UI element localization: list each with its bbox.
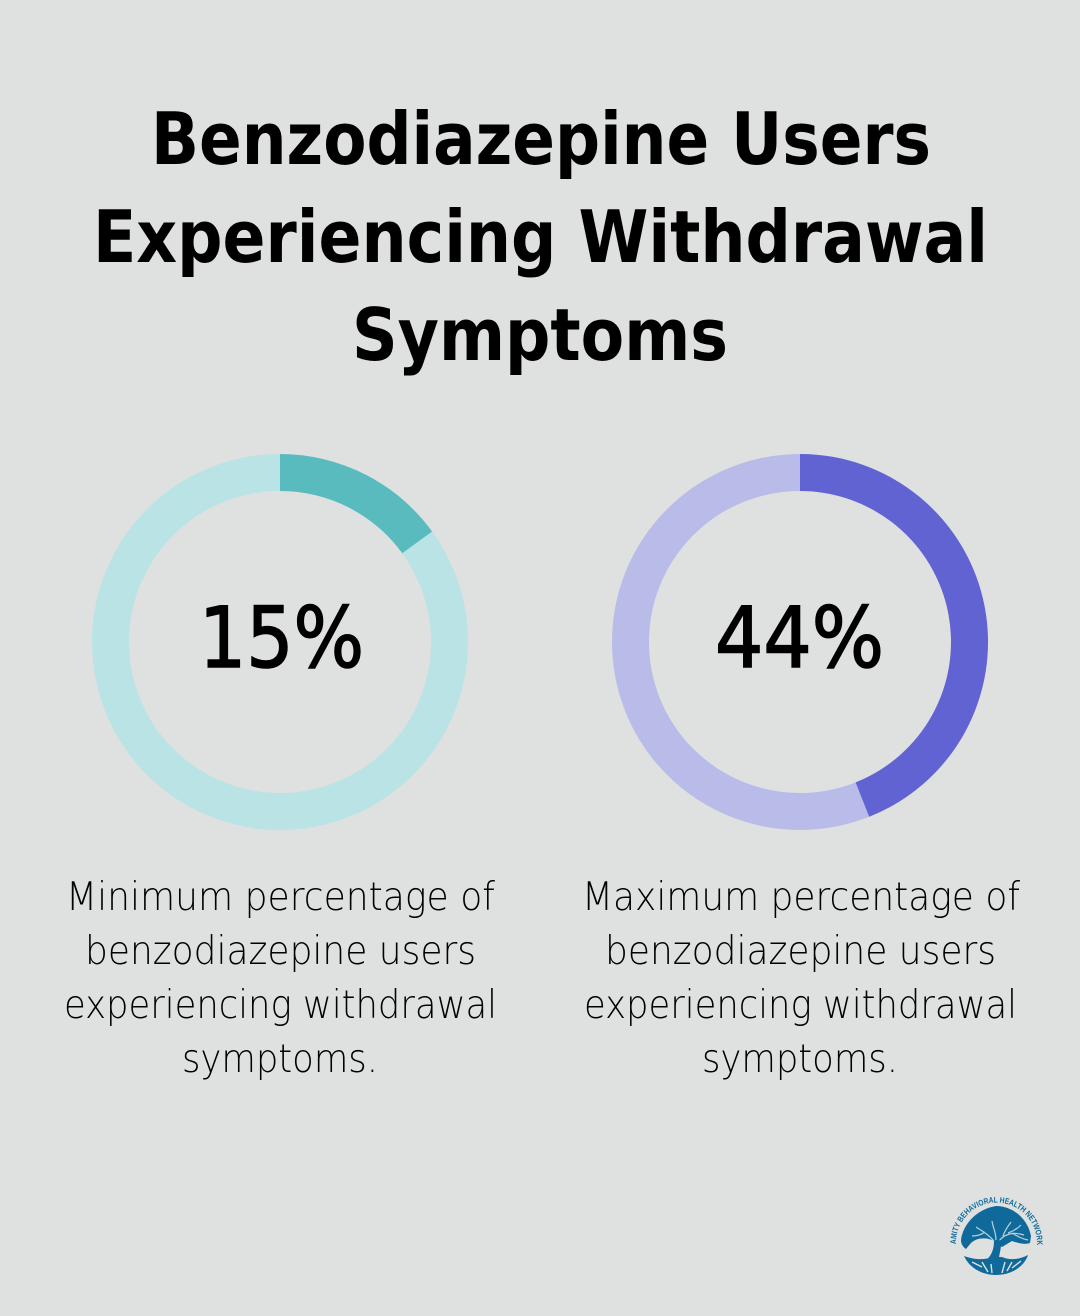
description: minimum: Minimum percentage of	[66, 874, 495, 920]
description: minimum: benzodiazepine users	[85, 928, 476, 974]
donut chart: 44%	[630, 454, 988, 817]
value: 44%: 44%	[715, 589, 884, 687]
description: minimum: symptoms.	[182, 1036, 378, 1082]
description: maximum	[582, 874, 1020, 1082]
description: minimum	[64, 874, 497, 1082]
description: maximum: symptoms.	[702, 1036, 898, 1082]
donut chart: 15%	[110, 454, 450, 812]
title: Benzodiazepine Users	[151, 97, 931, 181]
value: 15%: 15%	[199, 589, 364, 687]
description: maximum: benzodiazepine users	[605, 928, 996, 974]
description: maximum: Maximum percentage of	[582, 874, 1020, 920]
logo: Amity Behavioral Health Network	[950, 1197, 1043, 1275]
panel: minimum statistic	[64, 454, 497, 1082]
title	[93, 97, 988, 377]
title: Symptoms	[352, 293, 728, 377]
description: minimum: experiencing withdrawal	[64, 982, 497, 1028]
logo: Amity Behavioral Health Network: AMITY BEHAVIORAL HEALTH NETWORK	[950, 1197, 1043, 1246]
description: maximum: experiencing withdrawal	[584, 982, 1017, 1028]
panel: maximum statistic	[582, 454, 1020, 1082]
title: Experiencing Withdrawal	[93, 195, 988, 279]
